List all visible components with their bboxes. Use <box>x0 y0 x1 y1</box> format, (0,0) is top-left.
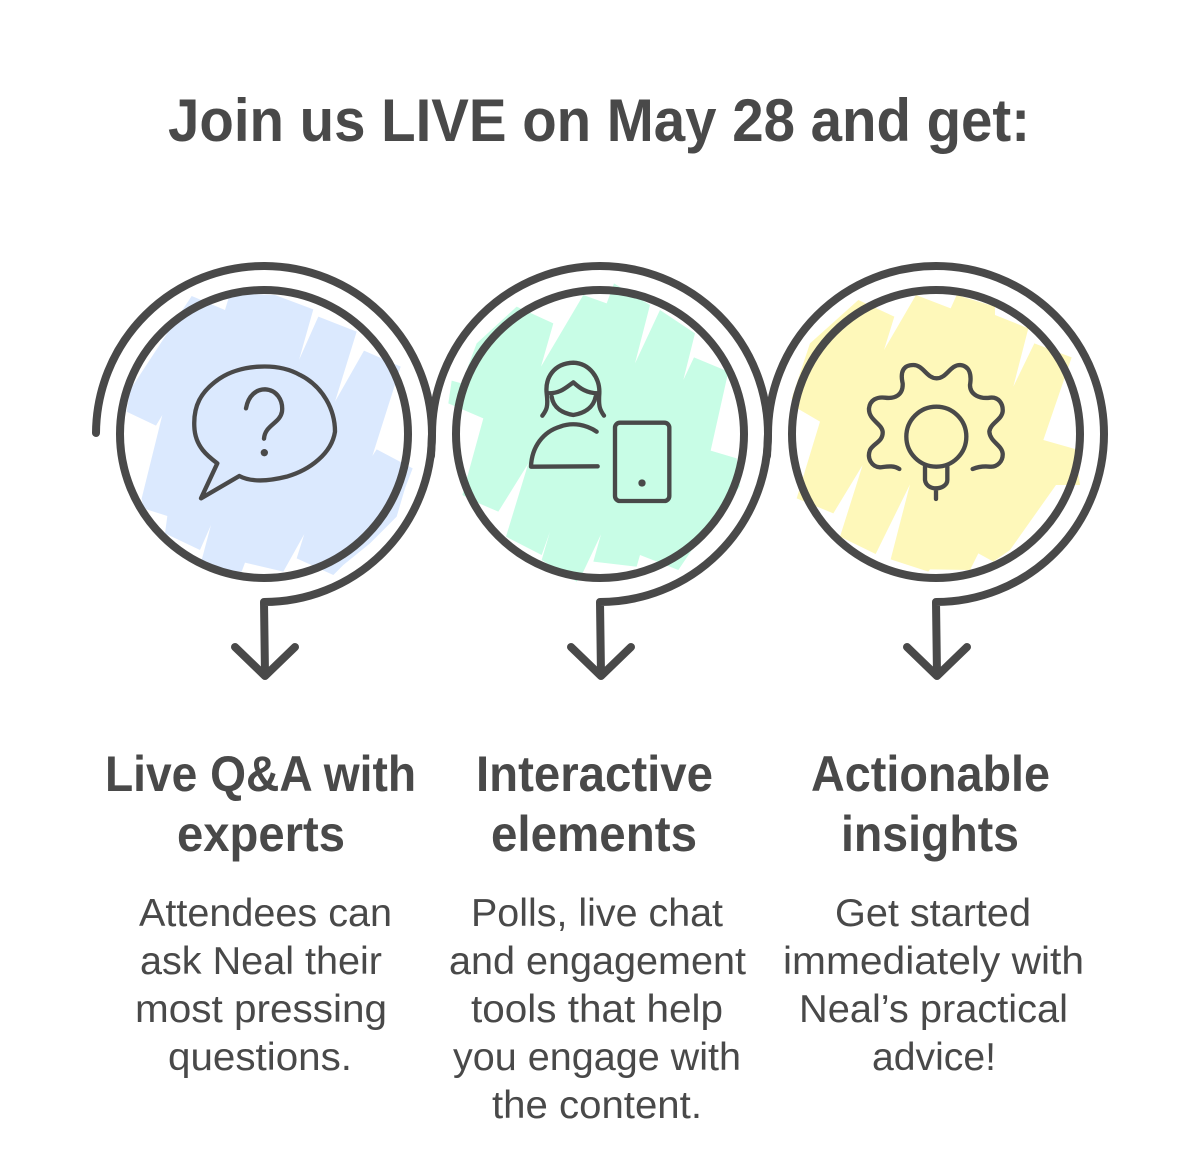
text block: Q&A description: Attendees can <box>139 892 392 935</box>
text block: interactive description: you engage with <box>453 1036 741 1079</box>
inner circle <box>120 290 408 578</box>
heading: Live Q&A with experts <box>105 746 416 862</box>
panel: interactive elements <box>431 266 768 676</box>
text block: interactive description: and engagement <box>449 940 746 983</box>
text block: Q&A description <box>135 892 392 1079</box>
heading: Interactive elements: elements <box>491 806 697 862</box>
arrow: curved path around circle <box>767 266 1104 676</box>
panel: actionable insights <box>767 266 1104 676</box>
text block: interactive description: tools that help <box>471 988 723 1031</box>
inner circle <box>792 290 1080 578</box>
icon: gear with light bulb <box>869 365 1003 499</box>
text block: Q&A description: most pressing <box>135 988 387 1031</box>
heading: Actionable insights: insights <box>841 806 1019 862</box>
yellow scribble fill <box>792 295 1080 572</box>
panel: live Q&A <box>96 266 432 676</box>
blue scribble fill <box>127 293 413 575</box>
inner circle <box>456 290 744 578</box>
text block: insights description: advice! <box>872 1036 996 1079</box>
icon: person with tablet <box>531 363 669 501</box>
heading: Live Q&A with experts: experts <box>177 806 345 862</box>
text block: insights description <box>783 892 1084 1079</box>
heading: Interactive elements <box>476 746 713 862</box>
text block: insights description: immediately with <box>783 940 1084 983</box>
text block: Q&A description: questions. <box>168 1036 352 1079</box>
text block: interactive description <box>449 892 746 1127</box>
heading: Interactive elements: Interactive <box>476 746 713 802</box>
text block: insights description: Neal’s practical <box>799 988 1068 1031</box>
heading: Actionable insights: Actionable <box>811 746 1050 802</box>
title: Join us LIVE on May 28 and get: <box>168 87 1030 154</box>
text block: interactive description: the content. <box>492 1084 702 1127</box>
arrow: curved path around circle <box>96 266 432 676</box>
text block: Q&A description: ask Neal their <box>140 940 382 983</box>
icon: speech bubble with question mark <box>194 367 335 498</box>
arrow: curved path around circle <box>431 266 768 676</box>
heading: Actionable insights <box>811 746 1050 862</box>
green scribble fill <box>448 283 740 582</box>
text block: interactive description: Polls, live chat <box>471 892 723 935</box>
heading: Live Q&A with experts: Live Q&A with <box>105 746 416 802</box>
text block: insights description: Get started <box>835 892 1031 935</box>
